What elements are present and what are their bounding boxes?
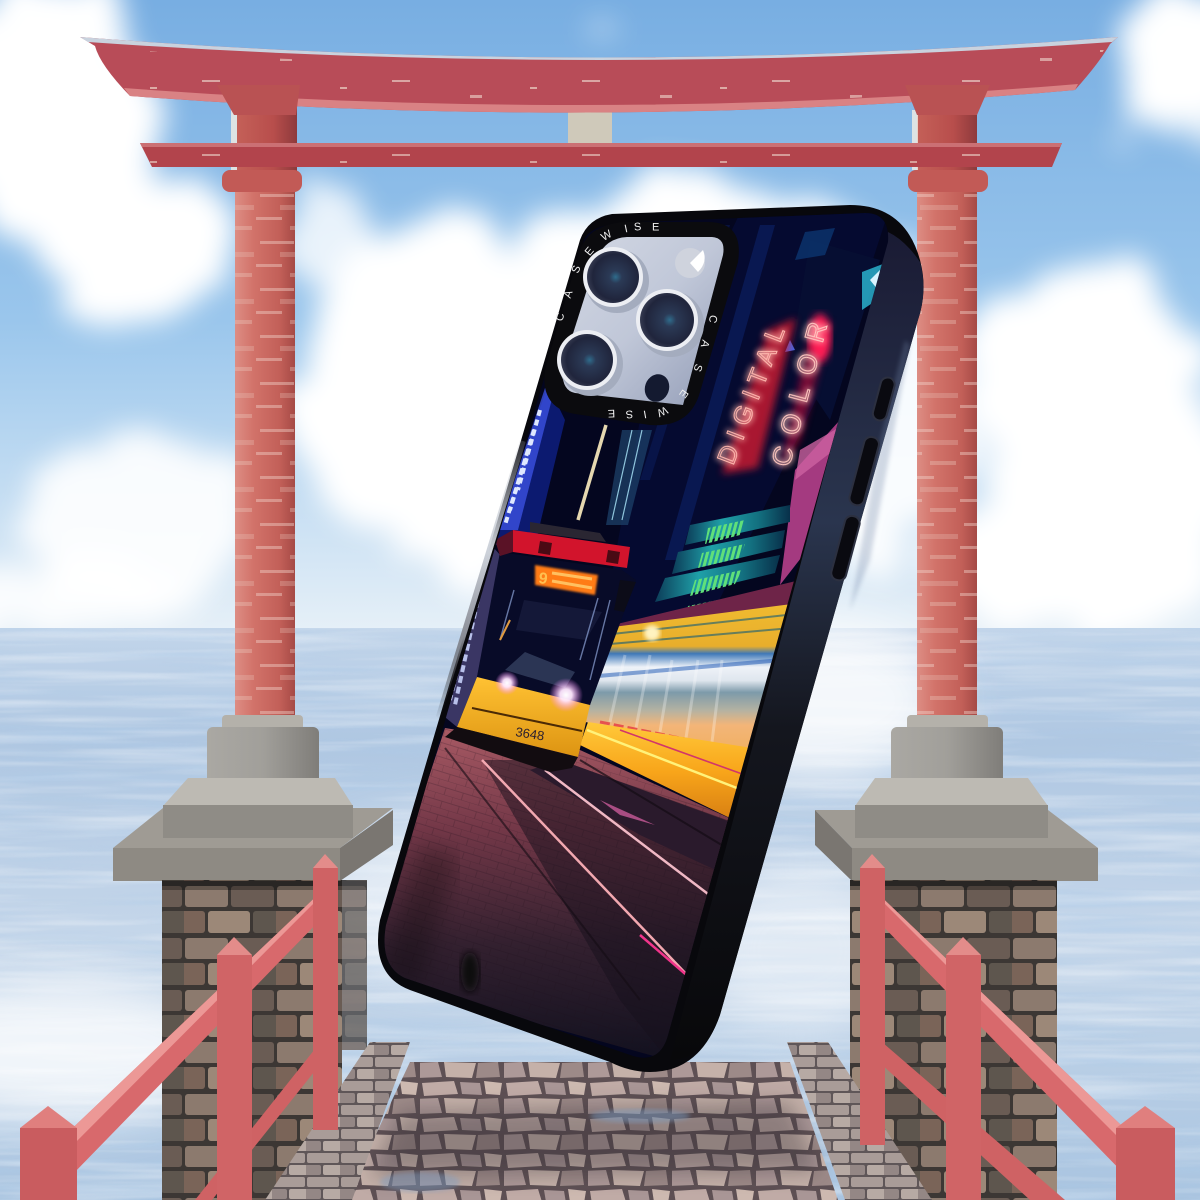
phone artwork: neon city with tram — [370, 200, 900, 1070]
left pedestal — [113, 715, 393, 1200]
headlights — [495, 671, 519, 695]
stone walkway — [265, 1042, 932, 1200]
camera bump with Casewise ring — [544, 221, 739, 425]
neon sign: DIGITAL: DIGITAL — [712, 323, 791, 468]
tram side — [446, 549, 500, 727]
tram windshield — [477, 552, 636, 705]
torii: lower beam — [140, 143, 1062, 167]
tram roof — [513, 530, 630, 568]
city buildings — [490, 213, 888, 640]
torii: right pillar — [912, 100, 977, 720]
destination sign — [535, 565, 598, 595]
torii: left pillar — [231, 100, 297, 720]
right railing — [860, 854, 1175, 1200]
side buttons — [830, 376, 896, 582]
tram top equipment — [530, 522, 606, 542]
tram undercarriage — [445, 727, 578, 772]
destination sign: 9 — [537, 570, 549, 588]
flash — [675, 248, 705, 278]
right pedestal — [815, 715, 1098, 1200]
left lens — [583, 247, 649, 313]
torii: top beam — [80, 37, 1118, 113]
tram yellow front — [457, 677, 590, 757]
light trails — [585, 603, 800, 752]
torii: pillar caps — [217, 85, 990, 115]
fleet number: 3648 — [515, 724, 545, 743]
torii: pillar collars — [222, 170, 988, 192]
sky background — [0, 0, 1200, 640]
bottom lens — [557, 330, 623, 396]
torii: centre strut — [568, 104, 612, 144]
CASEWISE ring text, right side: CASEWISE — [608, 313, 719, 420]
pink strip above the light trails — [619, 582, 794, 626]
tram street — [380, 728, 738, 1060]
camera plate — [562, 237, 724, 405]
tram — [440, 522, 636, 772]
camera ring — [544, 222, 739, 425]
microphone sensor — [641, 371, 673, 405]
teal building floors — [655, 505, 790, 607]
left railing — [20, 854, 338, 1200]
clouds — [0, 0, 1200, 630]
tram wing mirror — [614, 580, 636, 612]
phone case body — [378, 205, 924, 1072]
right lens — [636, 289, 704, 357]
sea — [0, 620, 1200, 1200]
neon sign: COLOR: COLOR — [766, 319, 833, 470]
CASEWISE ring text, left side: CASEWISE — [554, 221, 659, 323]
orange streak road — [580, 722, 752, 822]
